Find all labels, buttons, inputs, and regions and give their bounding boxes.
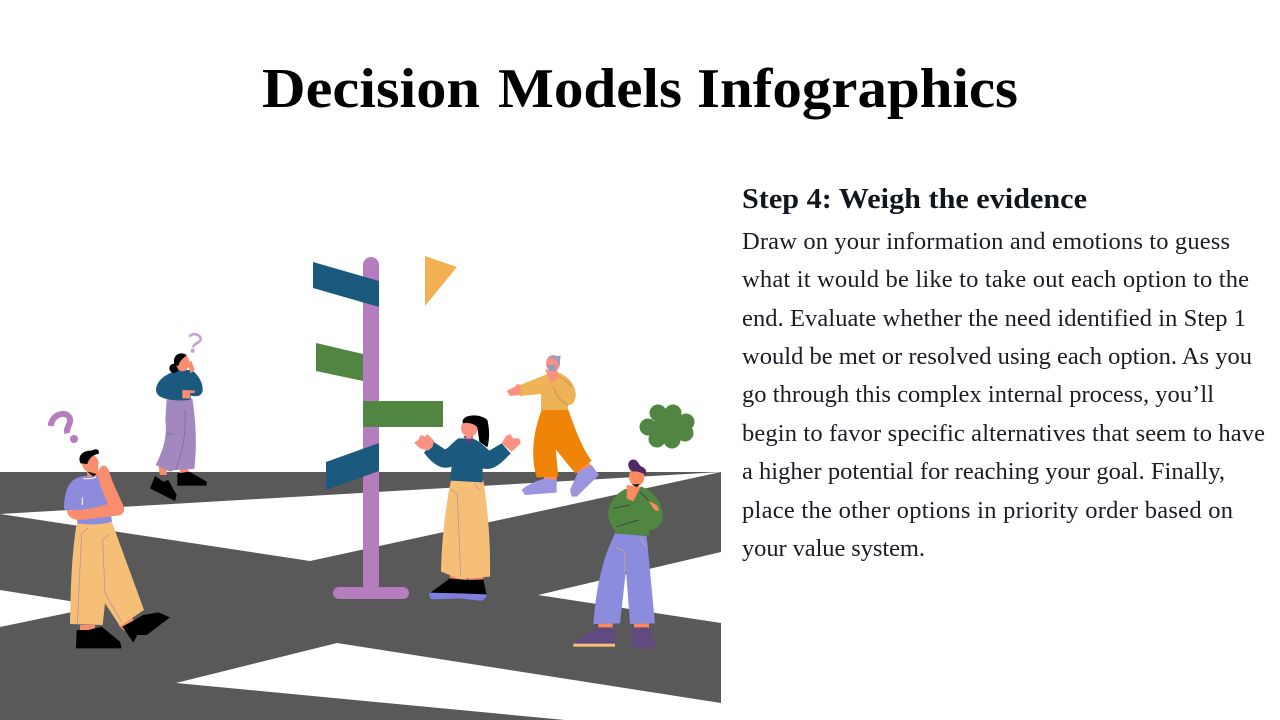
person: older man walking — [507, 355, 599, 497]
step description: place the other options in priority order based on — [742, 497, 1233, 524]
bush — [640, 404, 694, 448]
signpost — [313, 257, 443, 599]
road — [0, 472, 721, 720]
step description: end. Evaluate whether the need identified in Step 1 — [742, 305, 1246, 332]
title: Decision — [262, 58, 480, 120]
step description: would be met or resolved using each option. As you — [742, 343, 1252, 370]
title: Models — [498, 58, 682, 120]
flag triangle — [425, 256, 457, 306]
person: thinking man — [51, 414, 170, 648]
step description: go through this complex internal process, you’ll — [742, 381, 1214, 408]
step heading: Step 4: Weigh the evidence — [742, 183, 1087, 215]
step description — [742, 228, 1265, 562]
person: thinking woman — [150, 334, 207, 501]
illustration — [0, 256, 721, 720]
title: Infographics — [697, 58, 1018, 120]
step description: what it would be like to take out each option to the — [742, 266, 1249, 293]
person: woman with open hands — [414, 415, 521, 601]
step description: your value system. — [742, 535, 925, 562]
step description: begin to favor specific alternatives that seem to have — [742, 420, 1265, 447]
step description: a higher potential for reaching your goal. Finally, — [742, 458, 1225, 485]
step description: Draw on your information and emotions to guess — [742, 228, 1230, 255]
person: man with crossed arms — [573, 459, 663, 647]
